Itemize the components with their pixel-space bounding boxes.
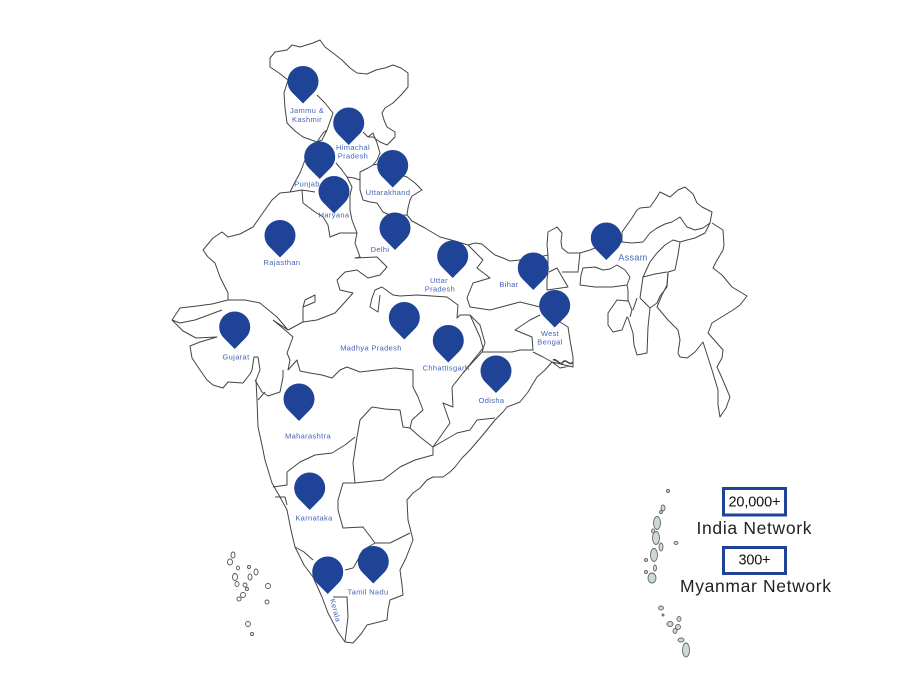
- pin: Uttar Pradesh: [437, 240, 468, 278]
- legend: Myanmar Network: Myanmar Network: [680, 576, 831, 596]
- state labels: Himachal: [336, 143, 370, 152]
- islands: Andaman and Nicobar: [644, 490, 690, 657]
- pin: Maharashtra: [284, 383, 314, 421]
- state labels: Chhattisgarh: [423, 364, 469, 372]
- pin: West Bengal: [539, 290, 570, 328]
- state labels: Gujarat: [222, 352, 250, 362]
- map: India and Myanmar outlines: [172, 40, 747, 643]
- pin: Delhi: [380, 212, 410, 250]
- state labels: Pradesh: [425, 284, 455, 294]
- state labels: Bengal: [537, 338, 563, 346]
- pin: Odisha: [480, 355, 512, 393]
- state labels: Uttarakhand: [366, 188, 410, 197]
- legend: India Network: 20,000+: [728, 494, 780, 510]
- pin: Assam: [591, 222, 622, 260]
- state labels: Odisha: [479, 396, 505, 405]
- pin: Karnataka: [294, 472, 325, 510]
- legend: Myanmar Network: 300+: [738, 552, 770, 568]
- pin: Tamil Nadu: [358, 546, 389, 584]
- pin: Chhattisgarh: [433, 325, 464, 362]
- state labels: Maharashtra: [285, 432, 331, 440]
- pin: Rajasthan: [264, 220, 296, 258]
- state labels: Tamil Nadu: [347, 588, 389, 596]
- state labels: Jammu &: [290, 106, 324, 115]
- state labels: Haryana: [319, 210, 350, 220]
- state labels: Punjab: [294, 180, 320, 188]
- state labels: Bihar: [499, 280, 519, 289]
- pin: Uttarakhand: [377, 150, 408, 188]
- state labels: Rajasthan: [264, 258, 300, 267]
- pin: Haryana: [318, 176, 350, 214]
- state labels: [222, 106, 648, 623]
- legend: India Network: [696, 488, 812, 538]
- pin: Bihar: [518, 252, 549, 290]
- islands: Lakshadweep: [228, 552, 270, 636]
- state labels: West: [541, 329, 560, 338]
- state labels: Pradesh: [338, 152, 368, 160]
- pin: Gujarat: [219, 311, 250, 349]
- pin: Jammu & Kashmir: [288, 66, 318, 104]
- state labels: Madhya Pradesh: [340, 344, 402, 352]
- legend: Myanmar Network: [680, 548, 831, 596]
- pin: Punjab: [304, 141, 335, 179]
- legend: India Network: India Network: [696, 518, 812, 538]
- pin: Himachal Pradesh: [333, 107, 364, 145]
- pin: Kerala: [312, 556, 343, 594]
- state labels: Uttar: [430, 276, 448, 285]
- state labels: Kashmir: [292, 115, 322, 124]
- state labels: Delhi: [371, 245, 389, 254]
- pin: Madhya Pradesh: [389, 302, 420, 340]
- state labels: Assam: [618, 252, 648, 262]
- state labels: Karnataka: [295, 514, 333, 522]
- state labels: Kerala: [328, 598, 343, 623]
